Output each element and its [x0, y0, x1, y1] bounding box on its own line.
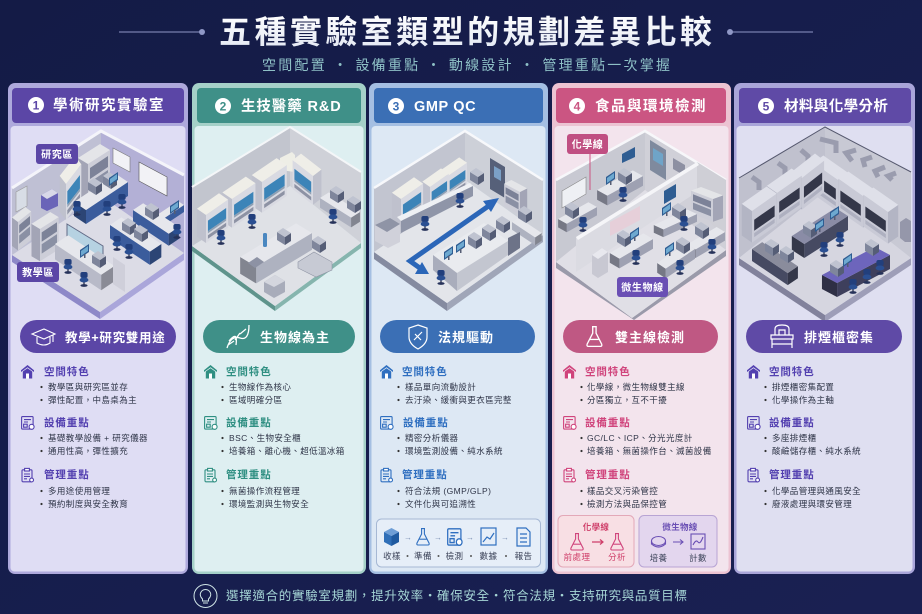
section: equipment focus: 通用性高，彈性擴充	[48, 446, 128, 456]
panel card 1	[8, 83, 188, 574]
section: space features: 空間特色	[226, 365, 272, 378]
pill: dense fume hoods: 排煙櫃密集	[804, 330, 874, 345]
section: space features: 彈性配置，中島桌為主	[48, 395, 137, 405]
section: equipment focus	[205, 416, 345, 456]
section: equipment focus: 培養箱、無菌操作台、滅菌設備	[587, 446, 712, 456]
section: space features: 樣品單向流動設計	[405, 382, 476, 392]
header 5: 材料與化學分析	[784, 97, 888, 115]
section: management focus	[564, 468, 667, 509]
pill: biology line focus: 生物線為主	[260, 330, 330, 345]
section: management focus	[748, 468, 861, 509]
section: management focus: 管理重點	[585, 468, 631, 481]
section: equipment focus: 設備重點	[585, 416, 631, 429]
label: teaching zone	[17, 262, 59, 282]
section: equipment focus	[564, 416, 712, 456]
header 3: 3	[393, 100, 400, 114]
microbiology line flow box: 計數	[689, 553, 707, 563]
section: management focus: 管理重點	[44, 468, 90, 481]
microbiology line flow box: 培養	[650, 553, 667, 563]
panel: academic research lab	[8, 83, 188, 574]
icon: sample cube	[384, 528, 399, 546]
isometric room: dense fume hoods	[739, 127, 911, 322]
section: management focus: 符合法規 (GMP/GLP)	[405, 486, 491, 496]
header 1: 學術研究實驗室	[53, 96, 165, 114]
section: management focus: 文件化與可追溯性	[405, 499, 476, 509]
header 2	[197, 88, 361, 123]
section: space features	[21, 365, 137, 405]
pill: dense fume hoods	[746, 320, 902, 353]
label: chemistry line	[567, 134, 608, 154]
section: management focus: 樣品交叉污染管控	[587, 486, 658, 496]
section: management focus: 管理重點	[402, 468, 448, 481]
section: space features	[747, 365, 834, 405]
section: space features	[563, 365, 685, 405]
flow diagram: sample to report	[376, 519, 540, 567]
header 2: 生技醫藥 R&D	[241, 98, 342, 115]
icon: light bulb	[194, 584, 217, 608]
section: space features: 化學操作為主軸	[772, 395, 834, 405]
flow arrows	[404, 533, 509, 542]
section: management focus: 檢測方法與品保控管	[587, 499, 667, 509]
section: space features: 排煙櫃密集配置	[772, 382, 834, 392]
section: management focus: 環境監測與生物安全	[229, 499, 309, 509]
flow arrows: →	[466, 533, 474, 542]
section: equipment focus	[381, 416, 503, 456]
section: equipment focus: GC/LC、ICP、分光光度計	[587, 433, 693, 443]
label: research zone: 研究區	[41, 148, 73, 161]
section: equipment focus: BSC、生物安全櫃	[229, 433, 301, 443]
microbiology line flow box: 微生物線	[662, 522, 698, 532]
label: microbiology line	[617, 277, 668, 297]
header 5: 5	[763, 100, 770, 114]
section: management focus	[205, 468, 309, 509]
flow labels: 檢測	[446, 551, 463, 561]
panel: materials and chemical analysis	[734, 83, 915, 574]
chemistry line flow box	[558, 516, 634, 567]
section: management focus: 無菌操作流程管理	[229, 486, 300, 496]
label: teaching zone: 教學區	[22, 266, 54, 279]
pill: regulation driven	[380, 320, 535, 353]
chemistry marker line	[589, 153, 591, 190]
section: space features: 分區獨立，互不干擾	[587, 395, 667, 405]
panel card 4	[552, 83, 731, 574]
footer message: 選擇適合的實驗室規劃，提升效率・確保安全・符合法規・支持研究與品質目標	[226, 588, 687, 603]
section: equipment focus: 環境監測設備、純水系統	[405, 446, 503, 456]
pill: regulation driven: 法規驅動	[438, 330, 494, 345]
flow labels: 報告	[515, 551, 532, 561]
section: equipment focus	[748, 416, 861, 456]
section: equipment focus: 多座排煙櫃	[772, 433, 817, 443]
section: equipment focus: 設備重點	[403, 416, 449, 429]
isometric room: one-way GMP flow	[374, 131, 543, 311]
section: space features: 空間特色	[769, 365, 815, 378]
flow labels: 數據	[480, 551, 497, 561]
title ornament right	[727, 29, 813, 35]
icon: testing instrument	[448, 529, 462, 545]
isometric room: biotech lab	[192, 127, 361, 311]
label: microbiology line: 微生物線	[621, 281, 664, 294]
pill: teaching + research	[20, 320, 176, 353]
header 4	[556, 88, 726, 123]
section: space features: 空間特色	[44, 365, 90, 378]
section: space features: 去汙染、緩衝與更衣區完整	[405, 395, 512, 405]
header 4: 食品與環境檢測	[595, 97, 707, 115]
section: space features: 化學線，微生物線雙主線	[587, 382, 685, 392]
section: space features: 空間特色	[402, 365, 448, 378]
label: chemistry line: 化學線	[572, 138, 603, 151]
icon: report	[517, 528, 530, 546]
header 2: 2	[220, 100, 227, 114]
section: space features	[380, 365, 512, 405]
flow labels	[383, 551, 532, 561]
section: equipment focus: 設備重點	[44, 416, 90, 429]
flow labels: 收樣	[383, 551, 401, 561]
pill: teaching + research: 教學+研究雙用途	[65, 330, 165, 345]
section: equipment focus: 基礎教學設備 + 研究儀器	[48, 433, 148, 443]
isometric room: chemistry and microbiology lines	[556, 131, 726, 320]
header 3	[374, 88, 543, 123]
section: equipment focus	[22, 416, 148, 456]
section: management focus: 預約制度與安全教育	[48, 499, 128, 509]
panel: GMP QC	[369, 83, 548, 574]
chemistry line flow box: 化學線	[583, 522, 609, 532]
header 1: 1	[33, 98, 40, 112]
pill: dual main lines	[563, 320, 718, 353]
chemistry line flow box: 前處理	[564, 552, 590, 562]
section: management focus: 管理重點	[226, 468, 272, 481]
section: management focus: 化學品管理與通風安全	[772, 486, 861, 496]
chemistry line flow box: 分析	[608, 552, 626, 562]
section: equipment focus: 酸鹼儲存櫃、純水系統	[772, 446, 861, 456]
panel card 3	[369, 83, 548, 574]
subtitle: 空間配置 ・ 設備重點 ・ 動線設計 ・ 管理重點一次掌握	[262, 57, 670, 73]
panel card 5	[734, 83, 915, 574]
section: space features	[204, 365, 291, 405]
flow arrows: →	[501, 533, 509, 542]
section: management focus	[22, 468, 128, 509]
section: management focus: 管理重點	[769, 468, 815, 481]
panel: food and environmental testing	[552, 83, 731, 574]
section: space features: 教學區與研究區並存	[48, 382, 128, 392]
microbiology line flow box	[639, 516, 717, 567]
header 1	[12, 88, 184, 123]
flow labels: 準備	[414, 551, 432, 561]
pill: dual main lines: 雙主線檢測	[615, 330, 685, 345]
header 4: 4	[574, 100, 581, 114]
section: management focus	[381, 468, 491, 509]
header 3: GMP QC	[414, 99, 476, 115]
section: space features: 區域明確分區	[229, 395, 283, 405]
title: 五種實驗室類型的規劃差異比較	[219, 14, 715, 50]
section: equipment focus: 精密分析儀器	[405, 433, 459, 443]
section: management focus: 廢液處理與環安管理	[772, 499, 852, 509]
icon: data chart	[481, 528, 496, 545]
arrow: one-way flow	[410, 198, 499, 274]
flow arrows: →	[434, 533, 442, 542]
panel: biotech pharma R&D	[192, 83, 366, 574]
section: equipment focus: 設備重點	[226, 416, 272, 429]
isometric room: teaching and research zones	[12, 131, 184, 319]
section: management focus: 多用途使用管理	[48, 486, 110, 496]
icon: preparation flask	[417, 529, 429, 545]
section: equipment focus: 培養箱、離心機、超低溫冰箱	[229, 446, 345, 456]
section: space features: 空間特色	[585, 365, 631, 378]
pill: biology line focus	[203, 320, 355, 353]
header 5	[739, 88, 911, 123]
label: research zone	[36, 144, 78, 164]
section: equipment focus: 設備重點	[769, 416, 815, 429]
title ornament left	[119, 29, 205, 35]
section: space features: 生物線作為核心	[229, 382, 291, 392]
flow arrows: →	[404, 533, 412, 542]
panel card 2	[192, 83, 366, 574]
